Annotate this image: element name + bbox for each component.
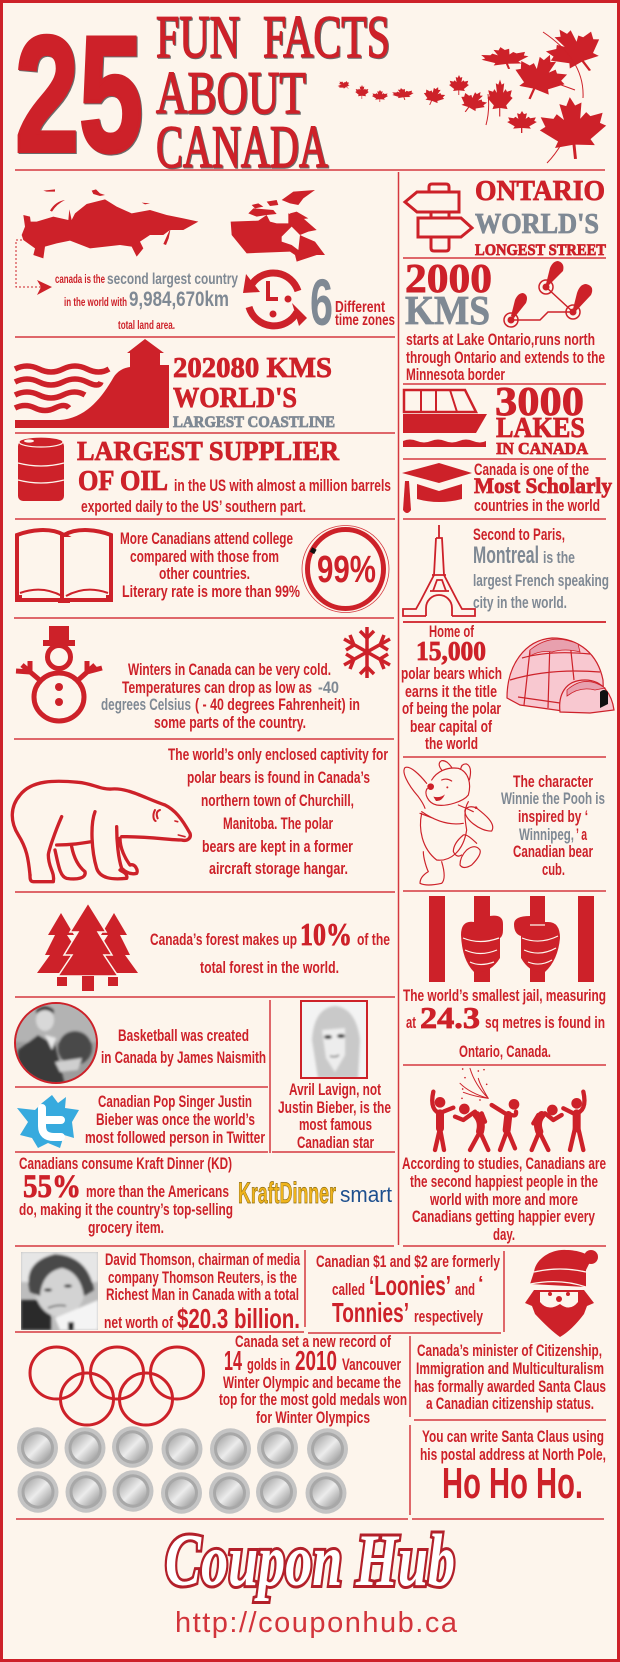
text: loonies and tonnies: Canadian $1 and $2 are formerly xyxy=(316,1253,501,1271)
icon: twitter bird burst xyxy=(17,1095,79,1148)
text: montreal: Montreal xyxy=(473,542,539,569)
text: winters xyxy=(101,661,360,732)
text: home of 15,000 polar bears: of being the polar xyxy=(402,700,501,718)
title xyxy=(15,2,390,186)
text: winters: Temperatures can drop as low as xyxy=(122,679,312,697)
text: largest supplier of oil: exported daily to the US’ southern part. xyxy=(81,498,306,516)
text: basketball: in Canada by James Naismith xyxy=(101,1049,266,1067)
text: richest man: company Thomson Reuters, is the xyxy=(108,1269,297,1287)
icon: route pins xyxy=(504,261,592,327)
photo: james naismith xyxy=(15,1002,97,1085)
icon: 99 percent ring xyxy=(302,526,389,612)
text: home of 15,000 polar bears: bear capital of xyxy=(410,718,492,736)
text: avril: Canadian star xyxy=(297,1134,374,1152)
dotted arrow xyxy=(16,240,52,295)
icon: 99 percent ring: 99% xyxy=(317,549,376,591)
icon: snowman xyxy=(16,626,102,721)
text: churchill: northern town of Churchill, xyxy=(201,792,354,810)
text: montreal xyxy=(473,526,609,612)
text: winnie: inspired by ‘ xyxy=(518,808,588,826)
text: college: Literary rate is more than 99% xyxy=(122,583,300,601)
icon: igloo xyxy=(507,638,614,713)
text: loonies and tonnies xyxy=(316,1253,501,1328)
text: churchill: Manitoba. The polar xyxy=(223,815,333,833)
text: loonies and tonnies: respectively xyxy=(414,1308,484,1326)
title: FUN xyxy=(156,4,240,70)
icon: olympic rings xyxy=(30,1347,204,1425)
title: CANADA xyxy=(156,114,328,180)
title: ABOUT xyxy=(156,60,306,126)
text: richest man: net worth of xyxy=(104,1314,173,1332)
text: most scholarly xyxy=(474,461,612,515)
text: churchill: The world’s only enclosed captivity for xyxy=(168,746,388,764)
text: smallest jail: at xyxy=(406,1014,416,1032)
heading: 3000 lakes: IN CANADA xyxy=(496,439,589,458)
text: second largest country: second largest country xyxy=(107,271,238,288)
text: street description xyxy=(406,331,605,384)
text: winters: ( - 40 degrees Fahrenheit) in xyxy=(195,696,360,714)
text: montreal: city in the world. xyxy=(473,594,567,612)
text: winters: -40 xyxy=(318,679,339,697)
text: smallest jail xyxy=(403,987,606,1061)
icon: russia map xyxy=(22,189,198,258)
text: college xyxy=(120,530,300,601)
time zones xyxy=(310,265,395,339)
text: winnie: cub. xyxy=(542,861,565,879)
text: gold record: 2010 xyxy=(295,1345,337,1376)
text: forest: Canada’s forest makes up xyxy=(150,931,297,949)
text: home of 15,000 polar bears: earns it the title xyxy=(405,683,497,701)
icon: pine trees xyxy=(37,903,138,991)
icon: happy people with confetti xyxy=(432,1068,584,1150)
icon: silver medals xyxy=(17,1426,348,1514)
text: richest man: David Thomson, chairman of media xyxy=(105,1251,301,1269)
text: second largest country: 9,984,670km xyxy=(129,288,229,311)
text: second largest country: total land area. xyxy=(118,320,175,332)
text: second largest country: in the world with xyxy=(64,297,127,309)
text: winnie: The character xyxy=(513,773,593,791)
text: college: compared with those from xyxy=(130,548,279,566)
text: gold record: Winter Olympic and became the xyxy=(223,1374,401,1392)
text: churchill xyxy=(168,746,388,878)
text: loonies and tonnies: and xyxy=(455,1281,475,1299)
logo: coupon hub: Coupon Hub xyxy=(165,1520,455,1602)
text: largest supplier of oil: OF OIL xyxy=(78,466,168,497)
time zones: 6 xyxy=(310,265,333,339)
text: winnie xyxy=(501,773,605,879)
icon: open book xyxy=(15,530,113,603)
text: richest man xyxy=(104,1251,301,1334)
divider lines xyxy=(14,170,606,1519)
icon: snowflake xyxy=(344,627,390,678)
heading: 3000 lakes xyxy=(495,378,589,458)
heading: ontario xyxy=(475,175,606,259)
icon: coastline lighthouse xyxy=(15,339,169,428)
title: 25 xyxy=(15,2,143,186)
text: forest: of the xyxy=(357,931,390,949)
heading: 2000 kms: KMS xyxy=(405,287,490,333)
text: happiest xyxy=(402,1155,606,1244)
text: gold record: for Winter Olympics xyxy=(256,1409,370,1427)
text: largest supplier of oil: LARGEST SUPPLIER xyxy=(77,436,339,466)
text: kraft dinner: do, making it the country’s top-selling xyxy=(19,1201,233,1219)
text: kraft dinner xyxy=(19,1155,233,1237)
icon: winnie the pooh xyxy=(404,761,493,885)
heading: ontario: LONGEST STREET xyxy=(475,242,606,259)
text: kraft dinner: grocery item. xyxy=(88,1219,164,1237)
text: churchill: aircraft storage hangar. xyxy=(209,860,348,878)
text: churchill: bears are kept in a former xyxy=(202,838,353,856)
heading: coastline: LARGEST COASTLINE xyxy=(173,414,335,431)
heading: coastline: 202080 KMS xyxy=(173,352,332,384)
text: smallest jail: 24.3 xyxy=(420,1000,480,1035)
text: bieber xyxy=(85,1093,265,1147)
text: most scholarly: Most Scholarly xyxy=(474,473,612,498)
time zones: time zones xyxy=(335,312,395,329)
text: gold record: Vancouver xyxy=(342,1356,401,1374)
text: second largest country xyxy=(55,271,238,332)
text: kraft dinner: Canadians consume Kraft Dinner (KD) xyxy=(19,1155,232,1173)
heading: ontario: ONTARIO xyxy=(475,175,605,207)
icon: santa claus xyxy=(525,1250,598,1337)
text: winnie: Winnipeg, xyxy=(519,826,574,844)
text: basketball: Basketball was created xyxy=(118,1027,249,1045)
text: second largest country: canada is the xyxy=(55,274,105,286)
heading: 2000 kms: 2000 xyxy=(405,255,492,301)
text: loonies and tonnies: ‘ xyxy=(478,1273,484,1295)
heading: coastline: WORLD'S xyxy=(173,382,297,414)
heading: 3000 lakes: LAKES xyxy=(496,412,585,444)
logo: kraft dinner smart: KraftDinner xyxy=(238,1177,336,1210)
text: home of 15,000 polar bears: the world xyxy=(425,735,478,753)
text: bieber: Bieber was once the world’s xyxy=(96,1111,255,1129)
icon: oil barrel xyxy=(18,437,64,501)
icon: canada map xyxy=(231,190,325,262)
icon: maple leaves xyxy=(335,19,615,163)
text: kraft dinner: 55% xyxy=(23,1169,81,1205)
text: gold record xyxy=(219,1333,407,1427)
text: avril: most famous xyxy=(299,1116,372,1134)
text: forest xyxy=(150,916,390,977)
text: street description: Minnesota border xyxy=(406,366,505,384)
text: home of 15,000 polar bears: polar bears which xyxy=(401,665,502,683)
time zones: Different xyxy=(335,299,385,316)
icon: clock with arrows xyxy=(243,273,307,326)
icon: polar bear xyxy=(12,781,190,882)
text: avril: Avril Lavign, not xyxy=(289,1081,381,1099)
text: montreal: is the xyxy=(543,549,575,567)
text: gold record: top for the most gold medals won xyxy=(219,1391,407,1409)
text: kraft dinner: more than the Americans xyxy=(86,1183,229,1201)
icon: mortarboard xyxy=(402,463,472,513)
icon: jail bars and hands xyxy=(429,896,594,982)
text: winters: degrees Celsius xyxy=(101,696,191,714)
photo: david thomson xyxy=(21,1252,98,1330)
text: avril: Justin Bieber, is the xyxy=(278,1099,391,1117)
icon: signpost xyxy=(405,184,472,251)
text: winters: Winters in Canada can be very cold. xyxy=(128,661,331,679)
heading: coastline xyxy=(173,352,335,431)
text: college: More Canadians attend college xyxy=(120,530,293,548)
text: loonies and tonnies: Tonnies’ xyxy=(332,1297,409,1328)
text: college: other countries. xyxy=(159,565,250,583)
text: forest: 10% xyxy=(300,916,352,952)
text: richest man: $20.3 billion. xyxy=(177,1303,300,1334)
text: basketball xyxy=(101,1027,266,1067)
text: santa citizenship xyxy=(414,1342,606,1413)
text: gold record: Canada set a new record of xyxy=(235,1333,391,1351)
text: winters: some parts of the country. xyxy=(154,714,306,732)
text: loonies and tonnies: ‘Loonies’ xyxy=(369,1270,451,1301)
heading: 3000 lakes: 3000 xyxy=(495,378,584,424)
text: winnie: ’ a xyxy=(576,826,588,844)
text: happiest: day. xyxy=(493,1226,515,1244)
text: largest supplier of oil xyxy=(77,436,391,516)
text: home of 15,000 polar bears xyxy=(401,623,502,753)
logo: kraft dinner smart: smart xyxy=(340,1182,392,1207)
text: loonies and tonnies: called xyxy=(332,1281,365,1299)
title: FACTS xyxy=(263,4,390,70)
icon: eiffel tower xyxy=(403,525,475,616)
text: forest: total forest in the world. xyxy=(200,959,339,977)
text: home of 15,000 polar bears: 15,000 xyxy=(416,636,486,666)
text: home of 15,000 polar bears: Home of xyxy=(429,623,474,641)
icon: boat xyxy=(403,390,487,447)
text: smallest jail: Ontario, Canada. xyxy=(459,1043,551,1061)
heading: ontario: WORLD'S xyxy=(475,208,599,240)
text: montreal: Second to Paris, xyxy=(473,526,565,544)
photo: avril lavigne xyxy=(301,1001,367,1078)
text: churchill: polar bears is found in Canada’s xyxy=(187,769,370,787)
text: bieber: most followed person in Twitter xyxy=(85,1129,265,1147)
text: bieber: Canadian Pop Singer Justin xyxy=(98,1093,252,1111)
text: largest supplier of oil: in the US with almost a million barrels xyxy=(174,477,391,495)
text: avril xyxy=(278,1081,391,1152)
heading: 2000 kms xyxy=(405,255,492,333)
text: gold record: golds in xyxy=(247,1356,290,1374)
footer url: http://couponhub.ca xyxy=(175,1607,458,1639)
text: gold record: 14 xyxy=(224,1345,242,1376)
text: ho ho ho xyxy=(420,1428,606,1508)
text: richest man: Richest Man in Canada with a total xyxy=(106,1286,299,1304)
